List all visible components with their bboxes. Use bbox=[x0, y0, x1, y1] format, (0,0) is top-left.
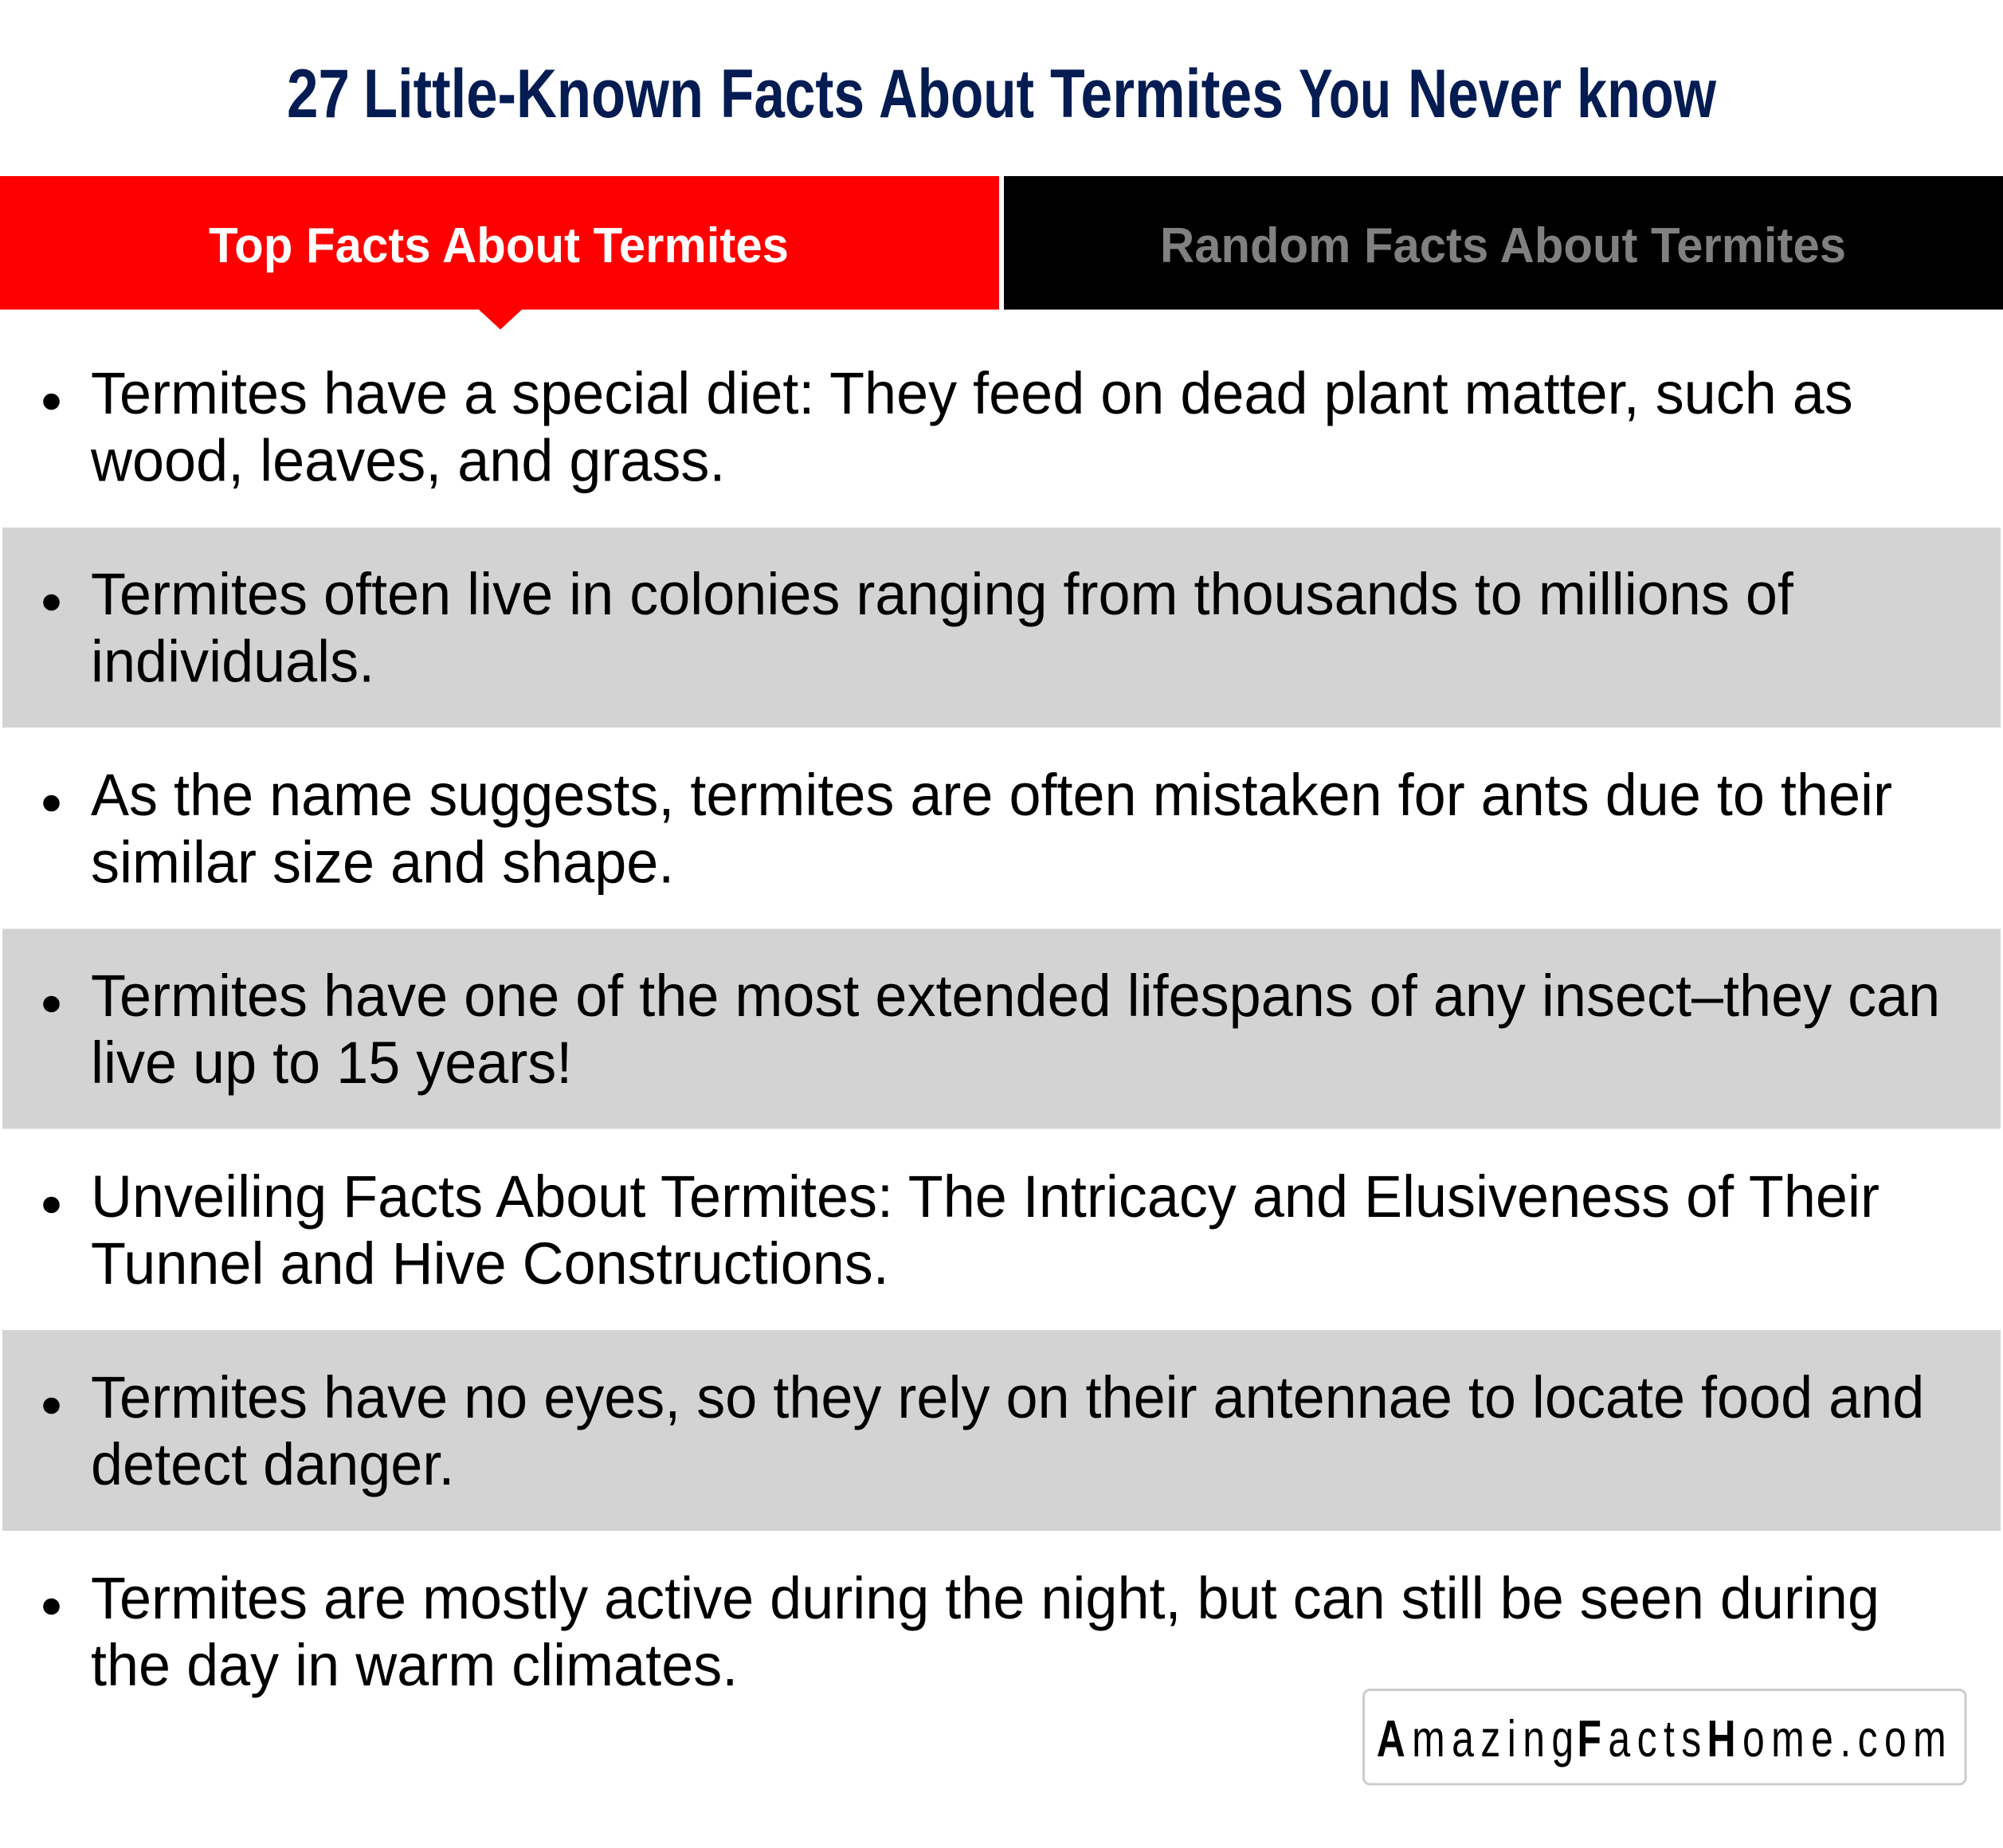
watermark badge: A bbox=[1377, 1710, 1412, 1768]
title: You bbox=[1299, 56, 1391, 132]
tab: top facts (active) bbox=[0, 176, 999, 330]
title: Never bbox=[1408, 56, 1562, 132]
watermark badge: H bbox=[1707, 1710, 1742, 1768]
fact 5 bbox=[43, 1163, 1880, 1297]
fact 4 band: live up to 15 years! bbox=[91, 1030, 572, 1096]
title: Facts bbox=[720, 56, 864, 132]
fact 6 band: detect danger. bbox=[91, 1431, 454, 1497]
fact 7: the day in warm climates. bbox=[91, 1632, 738, 1698]
tab: random facts (inactive): Random Facts About Termites bbox=[1160, 218, 1846, 273]
fact 1: wood, leaves, and grass. bbox=[90, 427, 725, 494]
fact 3: similar size and shape. bbox=[91, 829, 674, 896]
fact 7 bbox=[43, 1565, 1880, 1698]
fact 5: Tunnel and Hive Constructions. bbox=[91, 1230, 889, 1297]
watermark badge: ome.com bbox=[1742, 1710, 1953, 1768]
fact 2 band bbox=[2, 528, 2001, 728]
fact 7: Termites are mostly active during the night, but can still be seen during bbox=[91, 1565, 1880, 1631]
fact 6 band bbox=[2, 1330, 2001, 1531]
title: About bbox=[879, 56, 1034, 132]
fact 4 band: Termites have one of the most extended lifespans of any insect–they can bbox=[91, 963, 1940, 1029]
fact 6 band: Termites have no eyes, so they rely on their antennae to locate food and bbox=[91, 1364, 1924, 1430]
watermark badge: mazing bbox=[1412, 1710, 1581, 1768]
watermark badge: F bbox=[1577, 1710, 1608, 1768]
tab: top facts (active): Top Facts About Termites bbox=[209, 218, 789, 273]
title: Little-Known bbox=[363, 56, 704, 132]
fact 2 band: Termites often live in colonies ranging from thousands to millions of bbox=[91, 561, 1794, 627]
watermark badge: acts bbox=[1608, 1710, 1708, 1768]
title: Termites bbox=[1050, 56, 1284, 132]
fact 4 band bbox=[2, 929, 2001, 1128]
title: know bbox=[1577, 56, 1717, 132]
fact 3 bbox=[43, 762, 1892, 896]
fact 5: Unveiling Facts About Termites: The Intricacy and Elusiveness of Their bbox=[91, 1163, 1880, 1230]
fact 1: Termites have a special diet: They feed on dead plant matter, such as bbox=[91, 360, 1853, 426]
tab: random facts (inactive) bbox=[1004, 176, 2003, 309]
watermark badge bbox=[1364, 1689, 1966, 1784]
fact 3: As the name suggests, termites are often mistaken for ants due to their bbox=[91, 762, 1892, 828]
fact 2 band: individuals. bbox=[91, 628, 374, 695]
fact 1 bbox=[43, 360, 1853, 494]
title: 27 bbox=[287, 56, 350, 132]
